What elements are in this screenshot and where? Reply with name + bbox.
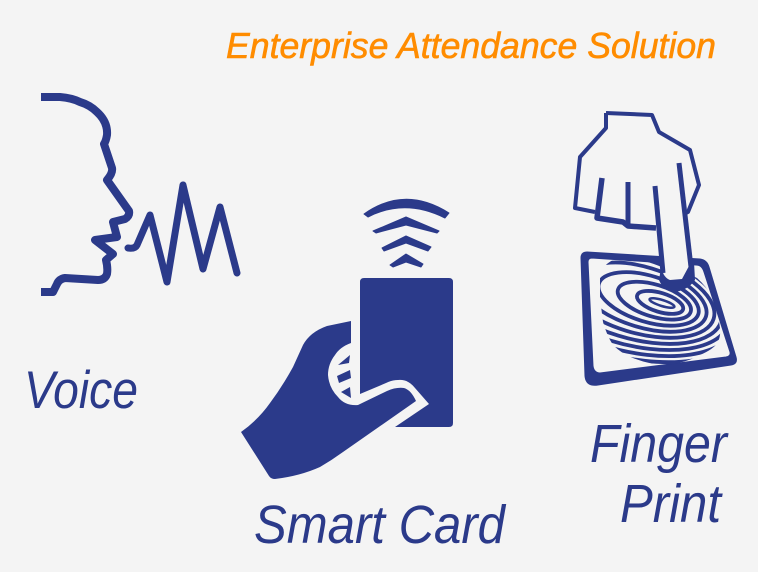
fingers <box>337 355 351 398</box>
icon: voice <box>41 97 237 292</box>
sound wave <box>128 185 237 282</box>
icon: fingerprint <box>573 111 737 386</box>
face profile <box>41 97 129 292</box>
sensor pad <box>581 252 736 385</box>
card <box>360 278 453 427</box>
contactless waves <box>364 199 449 267</box>
label: finger print: Print <box>620 474 723 534</box>
label: finger print <box>590 414 729 534</box>
fingertip <box>659 262 695 292</box>
print ridges <box>600 260 720 364</box>
title: Enterprise Attendance Solution <box>226 25 716 66</box>
hand <box>241 321 416 479</box>
pointing hand <box>655 165 691 285</box>
label: voice: Voice <box>24 361 138 420</box>
label: smart card: Smart Card <box>254 495 507 555</box>
label: finger print: Finger <box>590 414 729 474</box>
icon: smart card <box>241 199 453 479</box>
